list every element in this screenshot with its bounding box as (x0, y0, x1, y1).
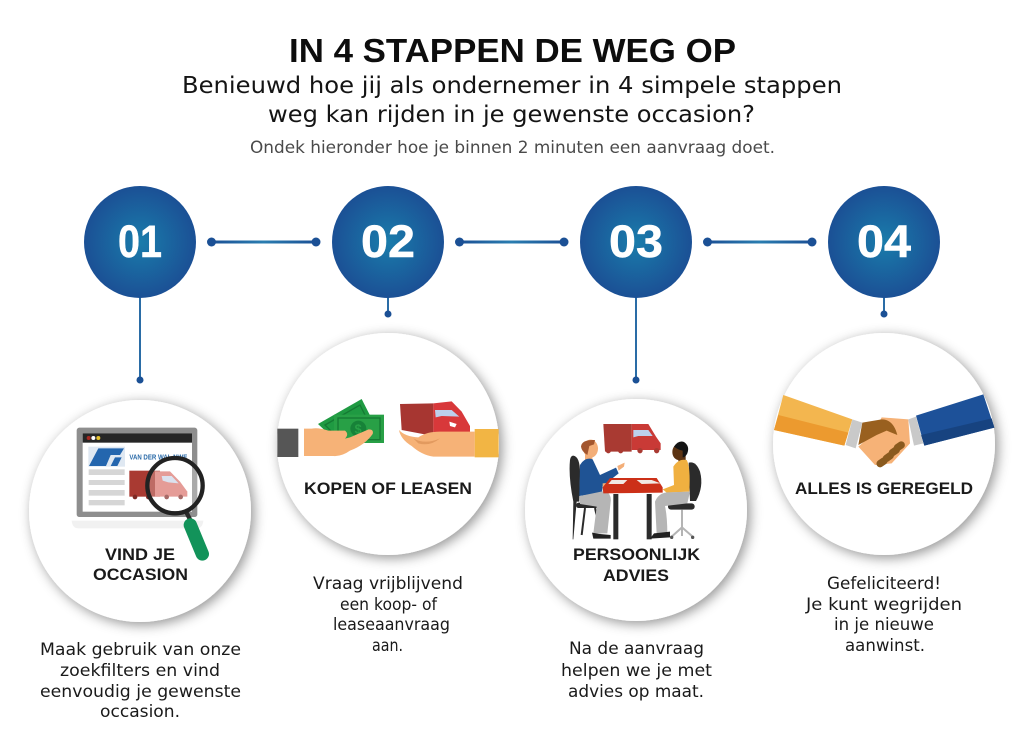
step 4 description: Gefeliciteerd! (827, 574, 941, 593)
title: IN 4 STAPPEN DE WEG OP (289, 32, 736, 69)
step 4 description: Je kunt wegrijden (805, 595, 962, 614)
intro text: Ondek hieronder hoe je binnen 2 minuten een aanvraag doet. (250, 138, 775, 157)
connector 2 to 3 (455, 238, 568, 246)
number badge 01: 01 (118, 216, 162, 267)
step 1 description (40, 640, 241, 721)
icon: hands exchanging money and truck (277, 399, 499, 457)
step 1 description: Maak gebruik van onze (40, 640, 241, 659)
panel: step 4 (773, 333, 995, 555)
icon: laptop with magnifier: VAN DER WAL NWE (129, 454, 188, 461)
step 3 label: PERSOONLIJK (573, 545, 701, 564)
step 1 description: eenvoudig je gewenste (40, 682, 241, 701)
step 1 label: VIND JE (105, 545, 175, 564)
vertical connector 4 (880, 296, 888, 318)
step 2 description: Vraag vrijblijvend (313, 574, 463, 593)
vertical connector 2 (384, 296, 392, 318)
subtitle: weg kan rijden in je gewenste occasion? (268, 100, 755, 128)
step 4 description (805, 574, 962, 655)
step 3 label (573, 545, 701, 585)
step 4 description: in je nieuwe (834, 615, 934, 634)
icon: handshake (774, 394, 994, 469)
subtitle: Benieuwd hoe jij als ondernemer in 4 simpele stappen (182, 71, 842, 99)
step 2 description: aan. (372, 636, 403, 655)
number badge 02: 02 (361, 216, 415, 267)
step 3 description: helpen we je met (561, 661, 713, 680)
panel: step 1 (29, 400, 251, 622)
vertical connector 1 (136, 296, 144, 384)
step 2 description: leaseaanvraag (333, 615, 450, 634)
subtitle (182, 71, 842, 128)
icon: laptop with magnifier (72, 428, 203, 554)
step 4 label: ALLES IS GEREGELD (795, 479, 973, 498)
step 3 description: advies op maat. (568, 682, 704, 701)
step 1 description: zoekfilters en vind (60, 661, 220, 680)
number badge 03: 03 (609, 216, 663, 267)
step 2 description (313, 574, 463, 655)
step 3 description: Na de aanvraag (569, 639, 704, 658)
step 2 description: een koop- of (340, 595, 438, 614)
connector 3 to 4 (703, 238, 816, 246)
step 1 label: OCCASION (93, 565, 188, 584)
number badge 04 (828, 186, 940, 298)
number badge 03 (580, 186, 692, 298)
number badge 04: 04 (857, 216, 911, 267)
step 3 description (561, 639, 713, 701)
panel: step 2 (277, 333, 499, 555)
icon: advisor meeting at table (570, 424, 701, 539)
step 1 description: occasion. (100, 702, 180, 721)
step 4 description: aanwinst. (845, 636, 925, 655)
vertical connector 3 (632, 296, 640, 384)
panel: step 3 (525, 399, 747, 621)
number badge 01 (84, 186, 196, 298)
number badge 02 (332, 186, 444, 298)
step 2 label: KOPEN OF LEASEN (304, 479, 472, 498)
connector 1 to 2 (207, 238, 320, 246)
step 3 label: ADVIES (603, 566, 669, 585)
step 1 label (93, 545, 188, 584)
icon: hands exchanging money and truck: $ (355, 422, 362, 436)
